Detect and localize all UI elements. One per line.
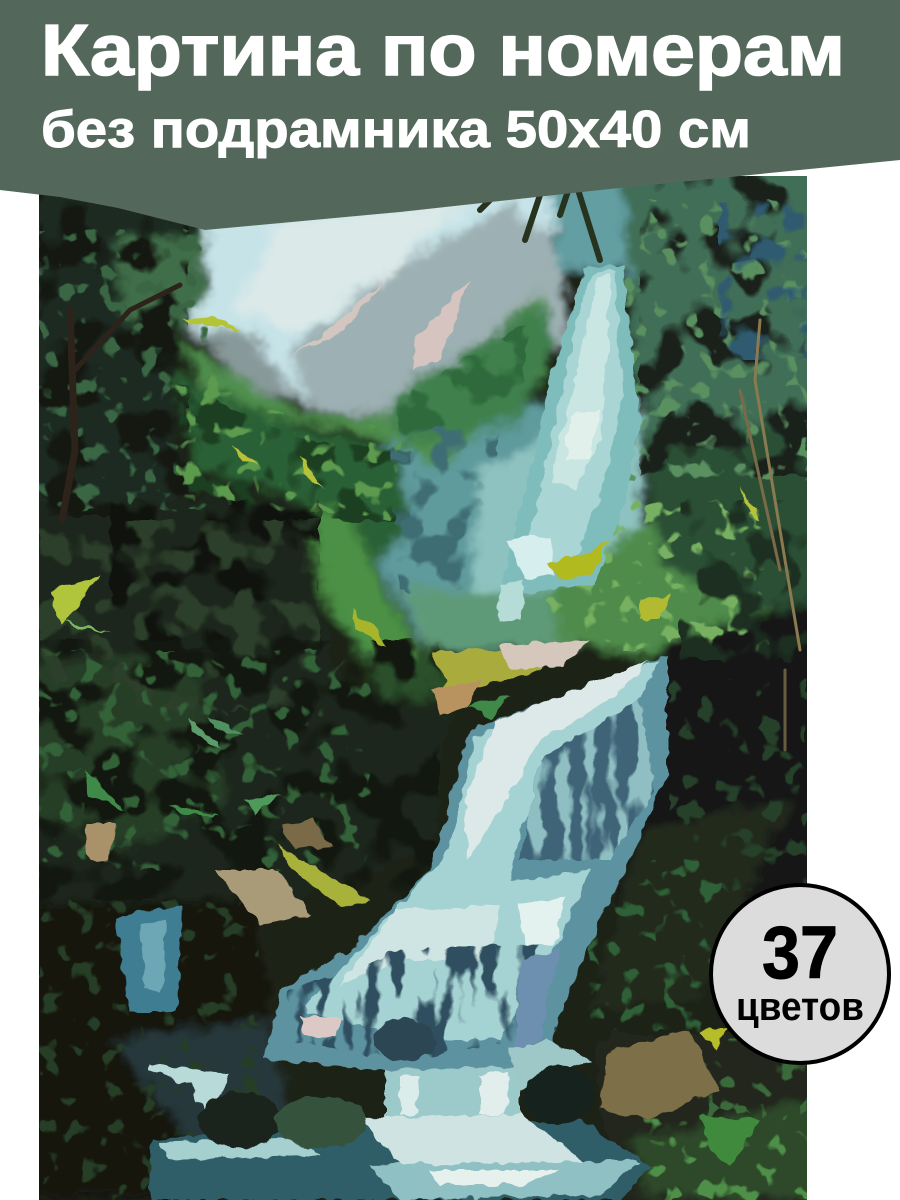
badge: 37 colours: 37 bbox=[762, 911, 838, 994]
foliage and colour patches bbox=[52, 280, 760, 1165]
background masses bbox=[39, 176, 807, 1200]
foliage blotches bbox=[39, 176, 807, 1200]
title: Картина по номерам bbox=[41, 11, 845, 91]
lower waterfall bbox=[265, 655, 668, 1118]
upper waterfall bbox=[498, 265, 640, 622]
badge: 37 colours bbox=[711, 885, 889, 1063]
subtitle: без подрамника 50х40 см bbox=[41, 101, 751, 159]
badge: 37 colours: цветов bbox=[736, 985, 864, 1029]
painting: jungle waterfall bbox=[39, 176, 807, 1200]
trunks and hanging branches bbox=[62, 180, 800, 750]
pool bbox=[115, 905, 650, 1200]
header banner bbox=[0, 0, 900, 230]
